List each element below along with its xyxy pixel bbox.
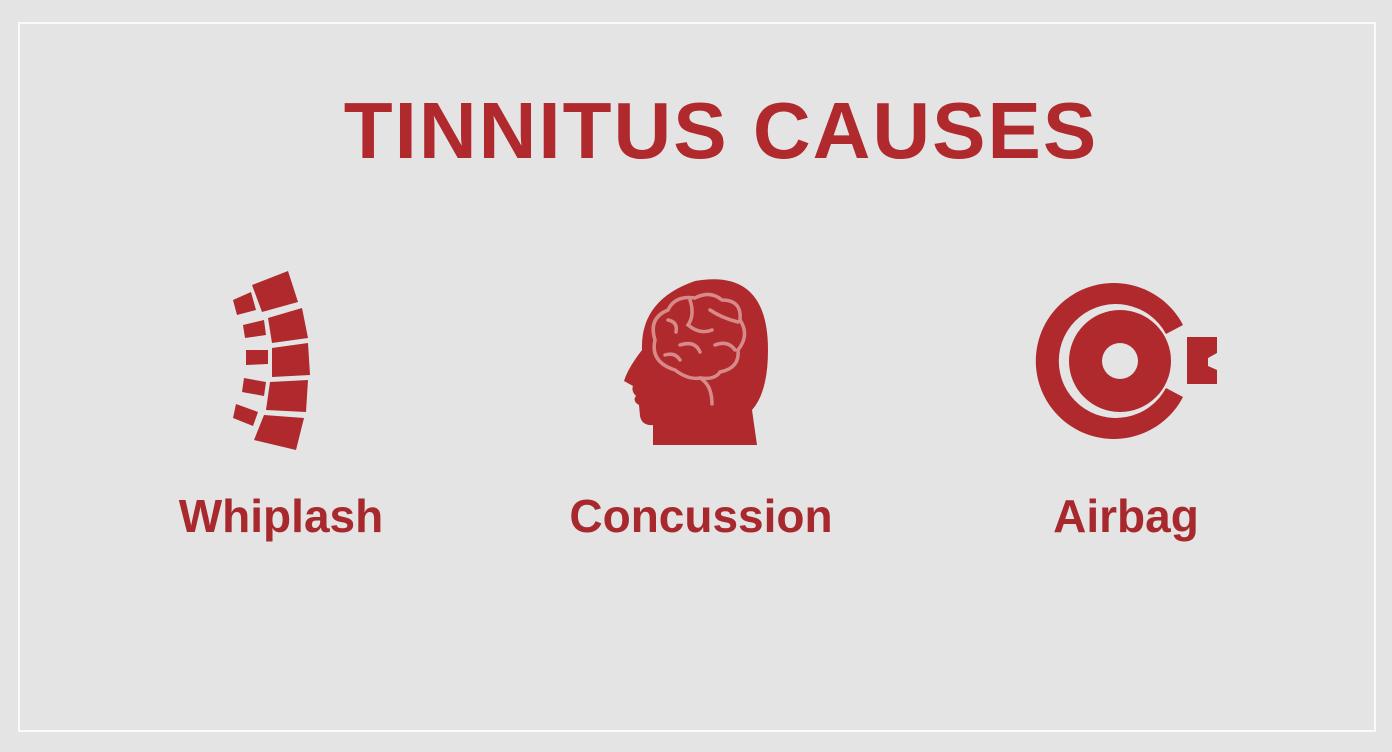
icon: spine [233,271,310,450]
title: TINNITUS CAUSES [344,86,1098,175]
label: airbag: Airbag [1053,490,1199,542]
label: concussion: Concussion [569,490,833,542]
icon: airbag [1036,283,1217,439]
label: whiplash: Whiplash [179,490,383,542]
icon: head with brain [624,279,768,445]
